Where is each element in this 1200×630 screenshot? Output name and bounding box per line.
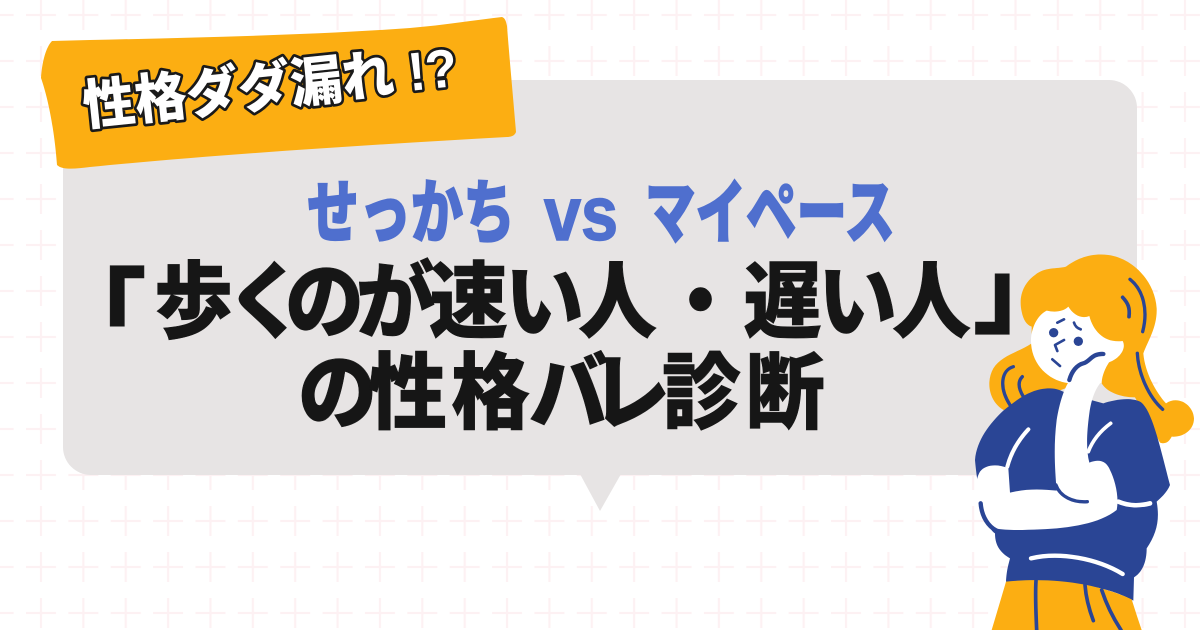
crossed arm — [976, 380, 1117, 530]
eyes — [1049, 328, 1083, 346]
shirt line highlights — [1007, 423, 1123, 574]
navy outlines: hair, face, arm, skirt — [981, 279, 1163, 630]
subtitle: せっかち: せっかち — [307, 174, 515, 252]
subtitle: vs: vs — [544, 172, 618, 257]
shirt — [975, 388, 1170, 601]
illustration: thinking woman — [975, 254, 1194, 630]
speech bubble panel — [63, 80, 1137, 511]
subtitle: マイペース: マイペース — [645, 174, 895, 252]
orange tag with rotated label — [41, 17, 516, 169]
closing bracket: 」 — [973, 239, 1072, 346]
subtitle — [307, 172, 895, 257]
tag label: 性格ダダ漏れ !? — [80, 37, 460, 137]
opening bracket: 「 — [47, 261, 146, 368]
hair — [989, 254, 1194, 443]
face and neck — [1031, 307, 1124, 383]
line 1 words: 歩くのが速い人・遅い人 — [154, 256, 971, 350]
skirt — [992, 580, 1142, 630]
sleeve cuff highlight — [1118, 502, 1150, 505]
main title line 1 — [47, 239, 1072, 368]
main title line 2: の性格バレ診断 — [298, 347, 825, 441]
